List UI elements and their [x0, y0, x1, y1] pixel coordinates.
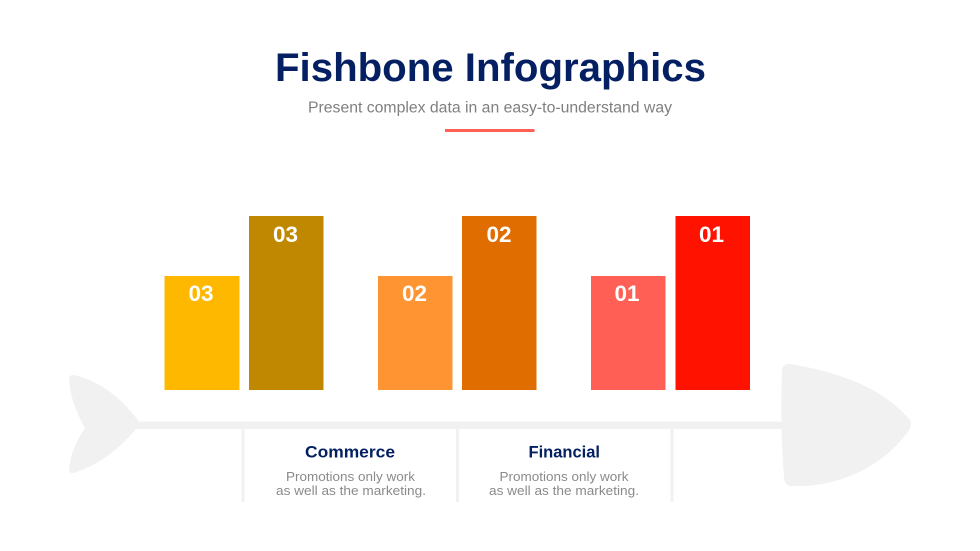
rib 2: [456, 429, 459, 502]
rib 1: [242, 429, 244, 502]
tall bar 03: [249, 216, 324, 390]
fish spine: [135, 422, 790, 429]
fish head: [781, 364, 911, 486]
heading: financial: Financial: [528, 442, 600, 462]
bar group 03: [164, 216, 324, 390]
tall bar 01: [676, 216, 750, 390]
short bar 02: [378, 276, 452, 390]
rib 3: [670, 429, 674, 502]
description: financial: [489, 469, 639, 498]
bar group 02: [378, 216, 536, 390]
short bar 03: [164, 276, 240, 390]
description: commerce: Promotions only work: [286, 469, 416, 484]
tall bar 02: 02: [486, 222, 512, 247]
tall bar 03: 03: [273, 222, 298, 247]
text block: commerce: [276, 442, 426, 498]
tall bar 02: [462, 216, 536, 390]
short bar 03: 03: [188, 281, 214, 306]
short bar 01: 01: [614, 281, 640, 306]
description: financial: Promotions only work: [500, 469, 629, 484]
description: commerce: [276, 469, 426, 498]
text block: financial: [489, 442, 639, 498]
heading: commerce: Commerce: [305, 442, 395, 462]
title underline: [445, 129, 534, 132]
description: commerce: as well as the marketing.: [276, 483, 426, 498]
tall bar 01: 01: [699, 222, 724, 247]
bar group 01: [591, 216, 750, 390]
fishbone skeleton: [69, 364, 911, 502]
short bar 02: 02: [402, 281, 427, 306]
subtitle: Present complex data in an easy-to-understand way: [308, 100, 672, 116]
description: financial: as well as the marketing.: [489, 483, 639, 498]
fish tail: [69, 375, 140, 473]
short bar 01: [591, 276, 666, 390]
title: Fishbone Infographics: [275, 46, 706, 90]
